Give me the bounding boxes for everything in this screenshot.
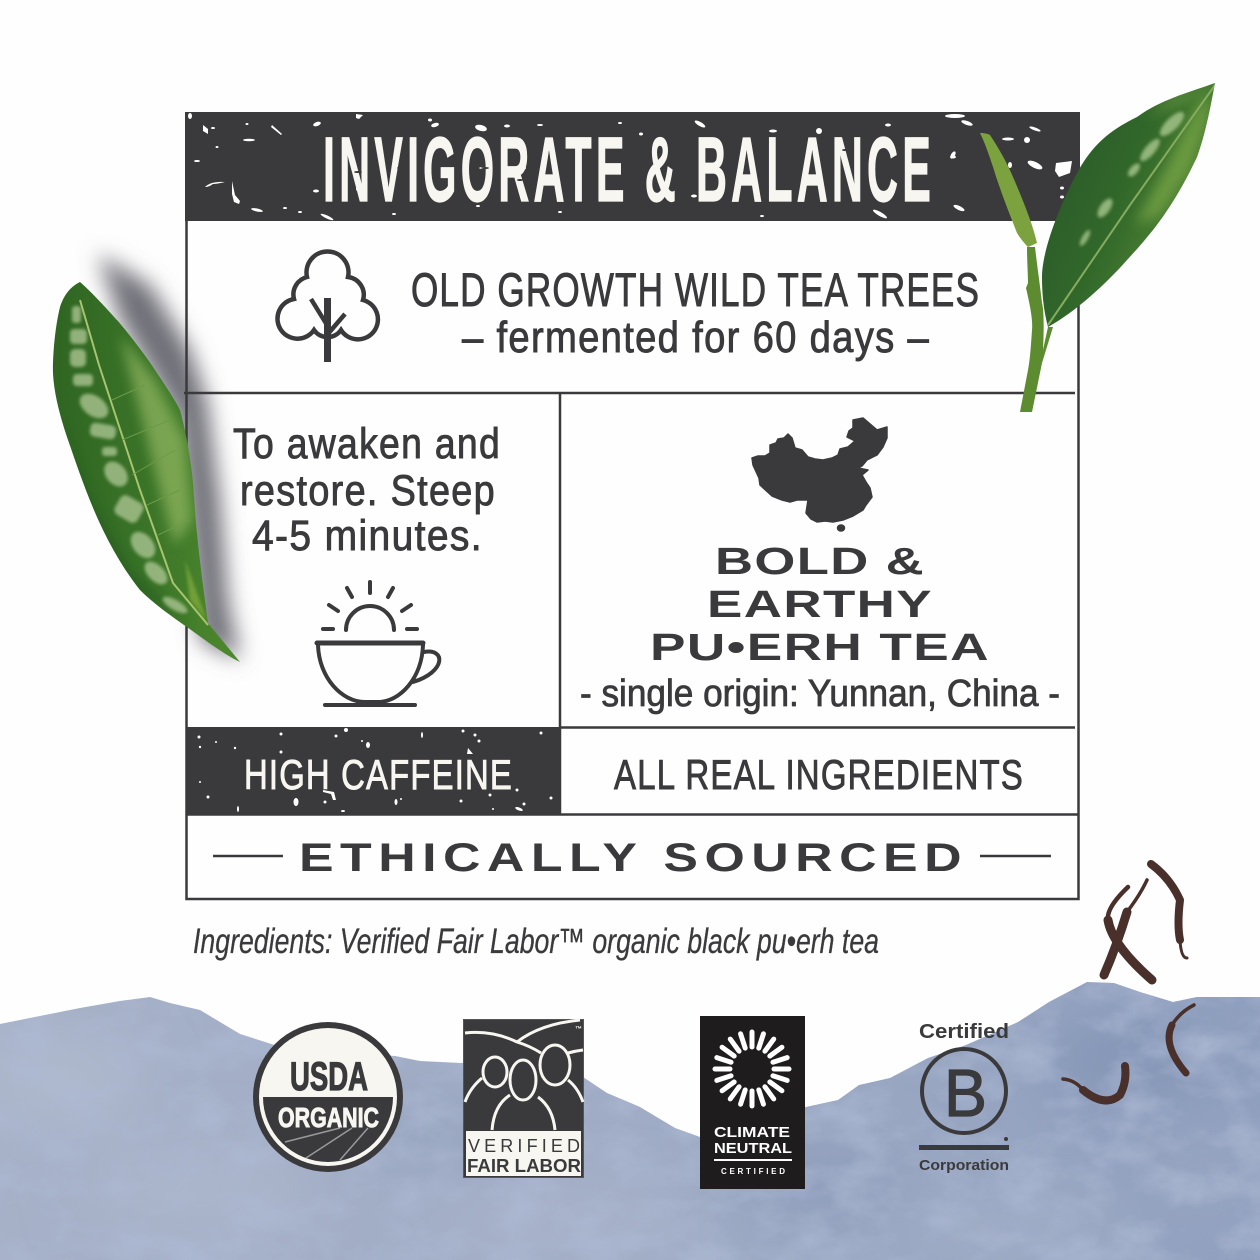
badge: verified fair labor: VERIFIED bbox=[468, 1136, 580, 1156]
loose tea twigs bbox=[1063, 864, 1194, 1100]
badge: USDA organic: ORGANIC bbox=[278, 1102, 379, 1133]
ingredients line: Ingredients: Verified Fair Labor™ organic black pu•erh tea bbox=[193, 922, 879, 961]
heading: old growth: – fermented for 60 days – bbox=[462, 313, 930, 362]
panel frame lines bbox=[184, 221, 1078, 899]
stem bbox=[1020, 247, 1053, 412]
heading: old growth bbox=[411, 263, 980, 362]
high caffeine badge bbox=[186, 727, 561, 814]
header speckles bbox=[188, 113, 1072, 221]
steeping text: To awaken and bbox=[233, 420, 501, 468]
large leaf bbox=[1042, 83, 1215, 327]
left tea leaf bbox=[53, 282, 240, 662]
label panel bbox=[184, 112, 1080, 899]
all real ingredients: ALL REAL INGREDIENTS bbox=[614, 751, 1024, 798]
badge: B corporation bbox=[919, 1021, 1009, 1174]
badge: climate neutral: CLIMATE bbox=[714, 1124, 790, 1141]
badge: verified fair labor bbox=[464, 1020, 584, 1178]
badge: verified fair labor: FAIR LABOR bbox=[467, 1156, 581, 1176]
icon: china map bbox=[752, 418, 887, 531]
badge: USDA organic bbox=[253, 1022, 403, 1172]
right tea sprig bbox=[980, 83, 1215, 412]
sun rays bbox=[715, 1032, 789, 1106]
tea type text: BOLD & bbox=[715, 541, 925, 583]
badge: B corporation: Certified bbox=[919, 1021, 1009, 1043]
steeping text bbox=[233, 420, 501, 560]
badge: USDA organic: USDA bbox=[290, 1055, 368, 1099]
steeping text: 4-5 minutes. bbox=[252, 512, 483, 560]
badge: B corporation: Corporation bbox=[919, 1157, 1009, 1174]
tea type text: PU•ERH TEA bbox=[650, 627, 990, 669]
bud bbox=[980, 133, 1037, 247]
badge: climate neutral: CERTIFIED bbox=[721, 1167, 785, 1176]
watercolor mountain background bbox=[0, 970, 1260, 1260]
tree icon bbox=[278, 251, 378, 362]
badge: verified fair labor: ™ bbox=[575, 1026, 582, 1033]
high caffeine badge: HIGH CAFFEINE bbox=[244, 751, 513, 798]
badge: climate neutral bbox=[700, 1016, 805, 1189]
steeping text: restore. Steep bbox=[240, 467, 496, 515]
heading: old growth: OLD GROWTH WILD TEA TREES bbox=[411, 263, 980, 316]
ethically sourced: ETHICALLY SOURCED bbox=[299, 836, 968, 880]
header band bbox=[185, 112, 1080, 221]
speckles over title bbox=[354, 149, 848, 181]
tea type text: EARTHY bbox=[707, 584, 933, 626]
tea type text bbox=[580, 541, 1060, 715]
shadow of left leaf bbox=[98, 254, 240, 660]
caffeine speckles bbox=[198, 728, 552, 812]
icon: sunrise cup bbox=[317, 582, 439, 705]
tea type text: - single origin: Yunnan, China - bbox=[580, 673, 1060, 715]
badge: climate neutral: NEUTRAL bbox=[714, 1140, 792, 1157]
badge: B corporation: B bbox=[944, 1056, 987, 1131]
